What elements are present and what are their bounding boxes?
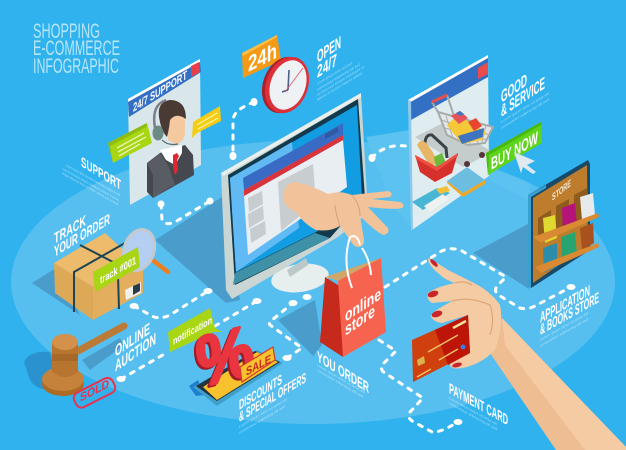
online store shopping bag [320,236,386,357]
application and books store label: consectetur adipiscing elit sed [540,317,588,348]
sold stamp: SOLD [80,376,109,405]
application and books store label [540,282,599,348]
tickets [412,186,450,212]
open 24/7 label: labore et dolore magna aliqua [317,71,363,102]
support label [62,154,121,206]
good and service label [501,70,549,130]
notification bubble: notification [173,315,212,348]
buy now button [486,122,542,175]
panel: 24/7 support [108,59,221,205]
gavel [42,326,124,396]
discounts label [239,370,306,435]
open 24/7 label: do eiusmod tempor incididunt ut [317,65,364,97]
text: & SPECIAL OFFERS [239,370,306,426]
open 24/7 label: Lorem ipsum dolor sit amet [317,61,352,86]
application and books store label: Lorem ipsum dolor sit amet elit [540,311,588,342]
parcel box [54,225,168,320]
red nails [427,258,462,368]
sold stamp [72,376,117,410]
hand from screen [283,182,404,247]
discounts label: DISCOUNTS [239,371,282,414]
good and service label: Lorem ipsum dolor sit amet elit [501,91,549,124]
title: INFOGRAPHIC [33,55,119,78]
discounts label: Lorem ipsum dolor sit amet elit [239,397,287,429]
arm [490,318,626,450]
open 24/7 label: 24/7 [317,49,337,82]
magnifying glass [118,225,168,275]
you order label: YOU ORDER [317,348,369,397]
hand and fingers [428,258,501,368]
payment card label: consectetur adipiscing elit sed [449,401,497,431]
you order label: consectetur adipiscing elit sed [317,368,363,399]
blue shirt [447,167,485,197]
title: SHOPPING [33,20,100,43]
monitor [221,93,368,299]
payment card label [449,380,508,431]
panel: 24/7 support: 24/7 SUPPORT [133,68,187,115]
shopping cart [415,95,493,167]
chat bubble: yellow [192,106,221,138]
track your order label: YOUR ORDER [54,210,110,261]
tablet with bookshelf [528,160,599,288]
good and service label: GOOD [501,70,527,107]
you order label [317,348,369,399]
open 24/7 label: consectetur adipiscing elit sed [317,62,360,92]
online store shopping bag: online [345,283,381,326]
support agent [147,100,194,198]
clock [254,51,317,119]
online auction label: AUCTION [115,329,156,376]
panel: good and service [408,55,493,230]
shadows [24,130,530,389]
good and service label: consectetur adipiscing elit sed [501,97,549,130]
support label: Lorem ipsum dolor sit amet consectetur adipiscing elit [66,163,120,197]
chat bubble: green [108,123,152,163]
payment card label: Lorem ipsum dolor sit amet elit [449,396,497,426]
online auction label: ONLINE [115,319,150,361]
phone with percent sign and sale tag: % [192,310,258,403]
track your order label: TRACK [54,212,86,248]
dotted connector paths [116,98,576,432]
discounts label: consectetur adipiscing elit sed [239,405,285,435]
tablet with bookshelf: STORE [552,178,571,204]
title [33,20,120,78]
24h flag: 24h [248,38,277,77]
support label: SUPPORT [81,154,121,194]
title: E-COMMERCE [33,37,120,60]
payment card [412,315,470,382]
online auction label [115,319,156,376]
online store shopping bag: store [345,300,375,340]
shelves and books [533,188,599,273]
track your order label [54,210,110,261]
red basket [415,135,458,182]
platform ellipse [11,140,615,424]
phone with percent sign and sale tag: % [190,312,256,405]
open 24/7 label: OPEN [317,32,341,67]
green track tag: track #001 [100,253,136,287]
good and service label: & SERVICE [501,73,545,121]
stand [269,258,331,296]
cursor icon [514,152,536,174]
open 24/7 label [317,32,364,102]
support label: sed do eiusmod tempor incididunt ut labore et dolore [63,167,119,202]
sale tag: SALE [246,351,271,379]
support label: magna aliqua ut enim ad minim veniam quis nostrud [62,171,118,206]
you order label: Lorem ipsum dolor sit amet elit [317,363,365,395]
buy now button: BUY NOW [491,127,538,174]
hand holding payment card [412,258,626,450]
notification bubble [168,308,222,352]
